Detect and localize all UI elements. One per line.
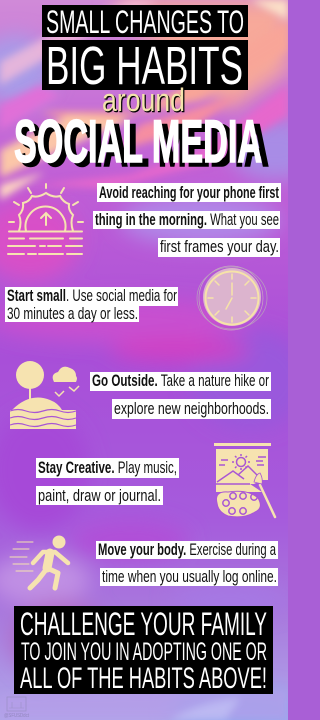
icon: sunrise [8, 184, 83, 254]
text: move your body [96, 540, 278, 586]
text: go outside [90, 371, 271, 419]
text: start small: 30 minutes a day or less. [7, 304, 138, 323]
logo: watermark [4, 697, 30, 719]
title: around: around [103, 83, 186, 119]
logo: watermark: @SFUSDdct [4, 713, 30, 719]
icon: clock [197, 266, 267, 330]
icon: painting and palette [214, 443, 275, 517]
icon: running figure [10, 536, 68, 588]
text: start small [5, 286, 178, 323]
text: start small: Start small. Use social media for [7, 286, 177, 305]
text: avoid reaching [93, 183, 281, 257]
text: stay creative: paint, draw or journal. [38, 486, 161, 505]
title: around: around [102, 82, 185, 118]
text: stay creative: Stay Creative. Play music, [38, 458, 177, 477]
callout: challenge your family [14, 606, 273, 695]
text: stay creative [36, 458, 179, 505]
icon: nature scene [10, 361, 79, 429]
